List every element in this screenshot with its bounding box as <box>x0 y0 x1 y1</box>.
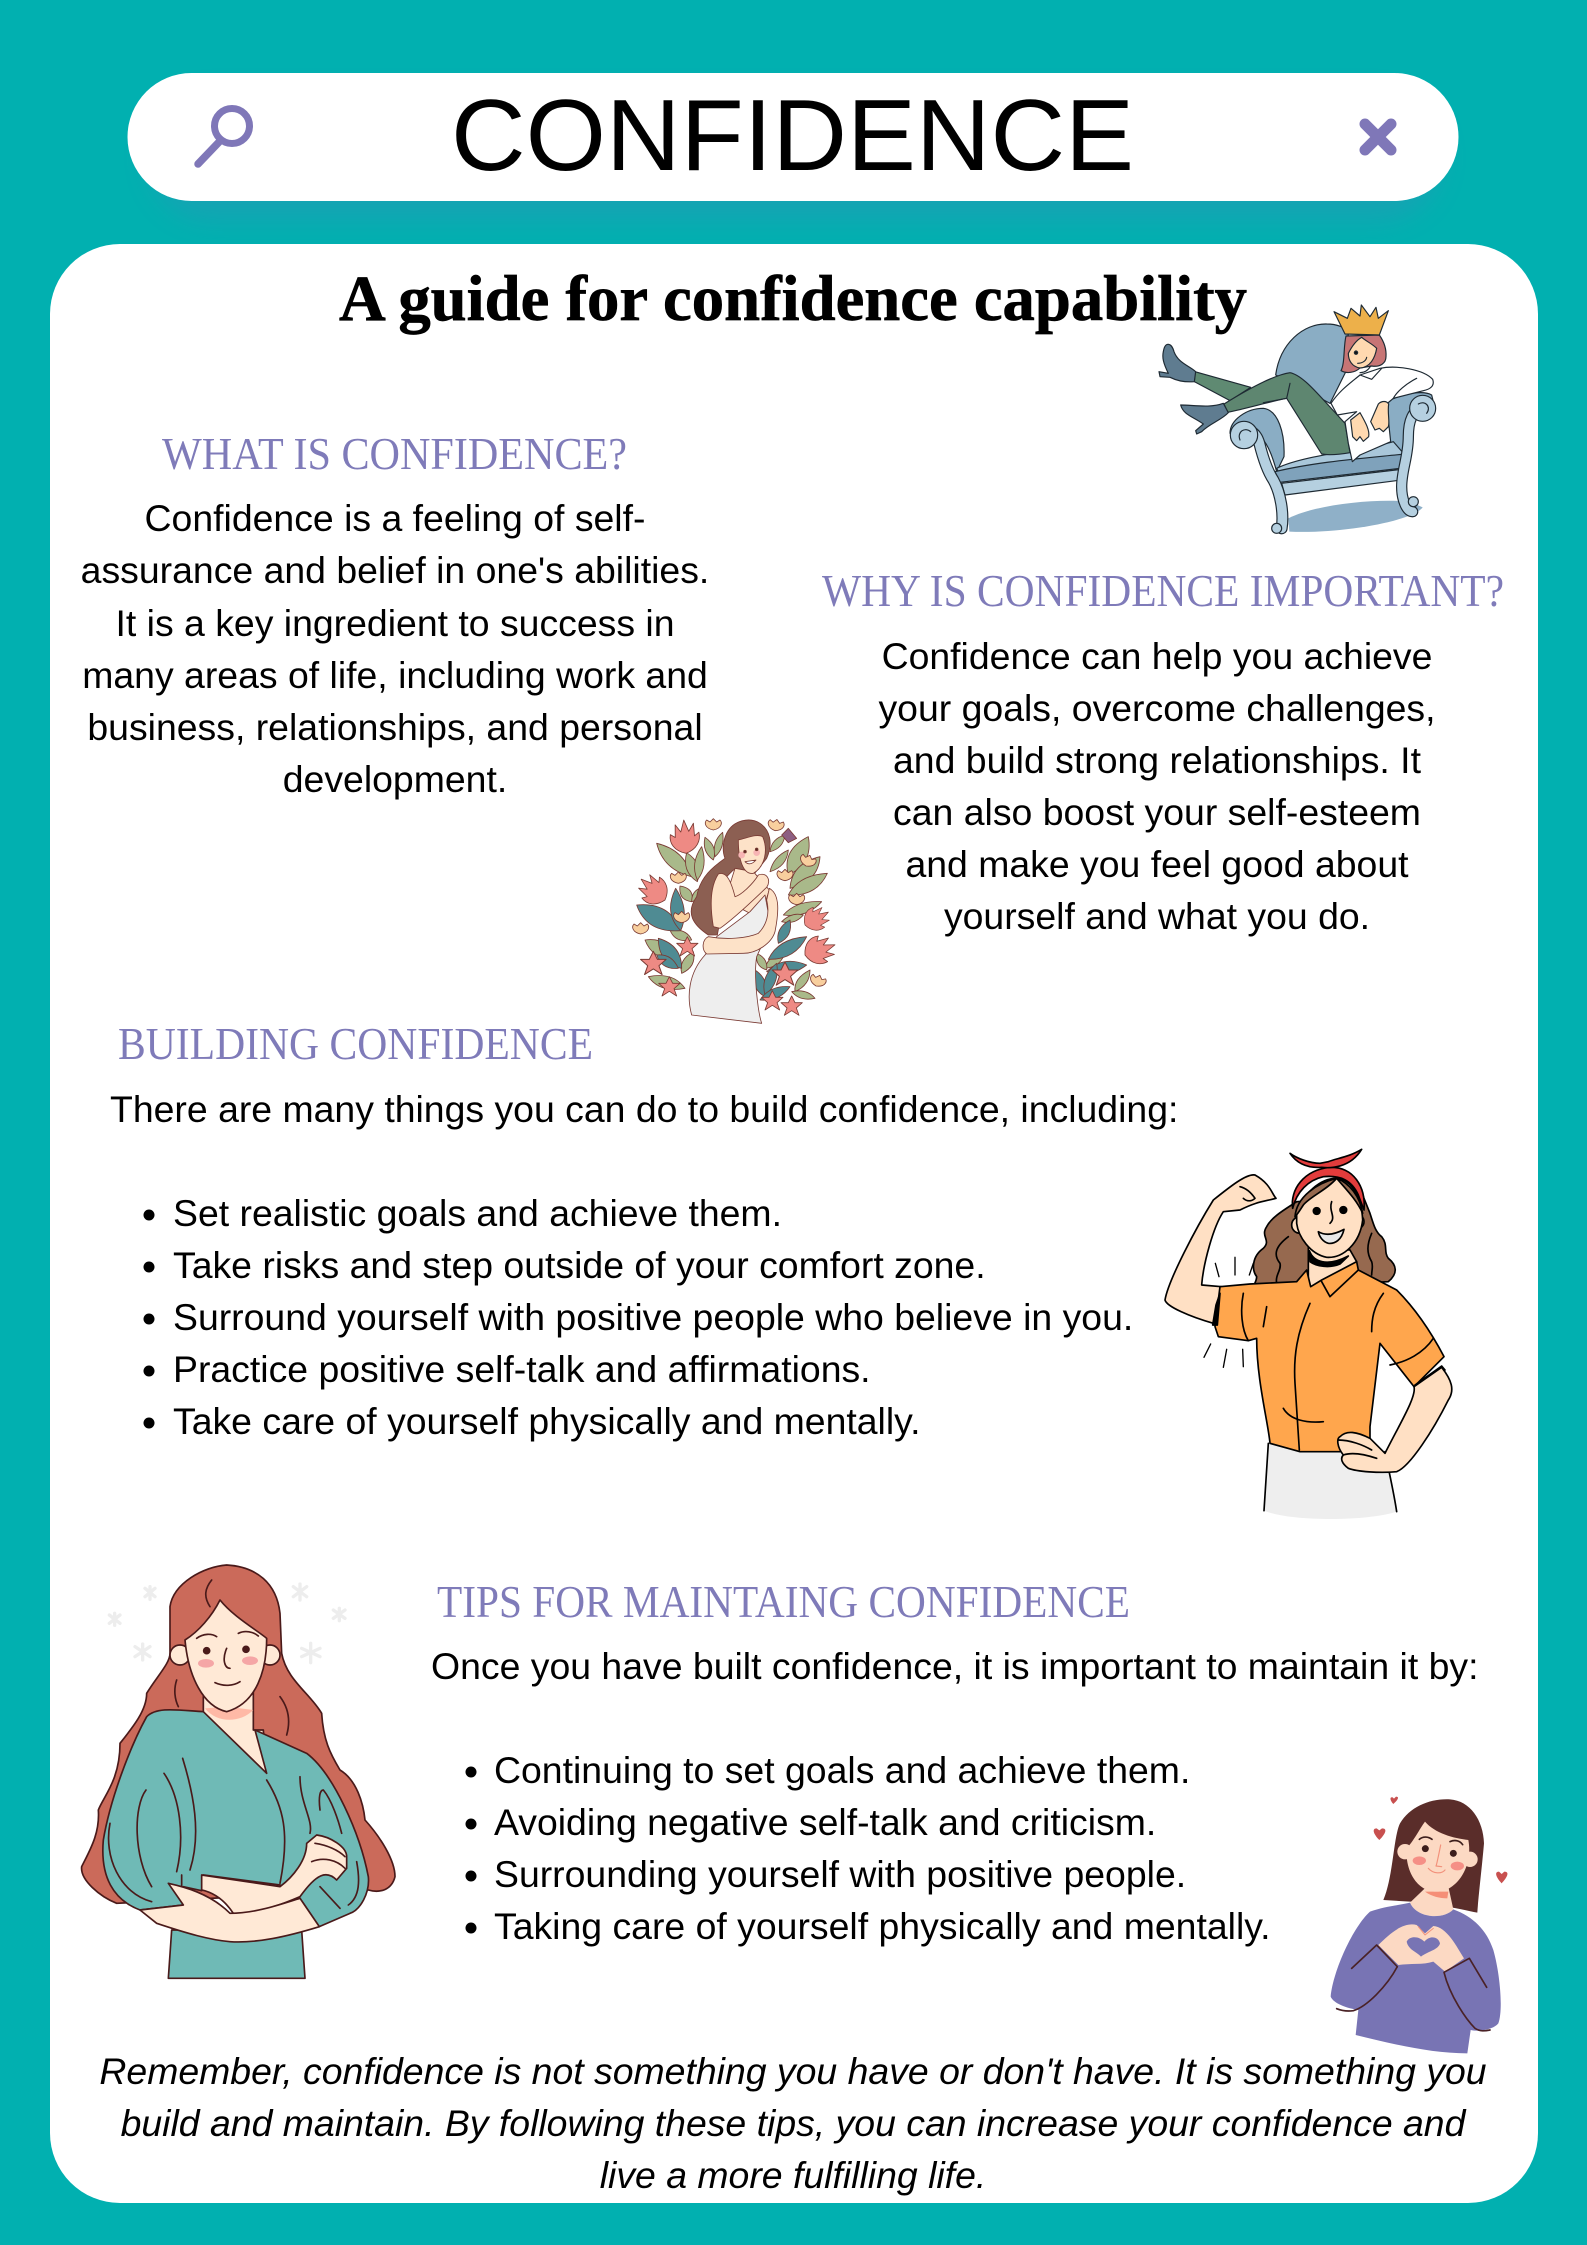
face <box>185 1600 267 1712</box>
neck <box>1308 1247 1357 1303</box>
search bar <box>128 73 1458 220</box>
neck <box>203 1690 267 1773</box>
heading: building confidence: BUILDING CONFIDENCE <box>118 1018 593 1069</box>
illustration: woman making heart <box>1331 1797 1507 2053</box>
white shirt <box>1331 367 1433 462</box>
hair <box>82 1565 395 1903</box>
icon: close cross <box>1365 124 1391 150</box>
text block: what is confidence: It is a key ingredient to success in <box>115 602 675 644</box>
skirt <box>1264 1443 1397 1519</box>
text block: what is confidence: Confidence is a feeling of self- <box>145 497 645 539</box>
intro text: building: There are many things you can do to build confidence, including: <box>110 1088 1178 1130</box>
panel: why is confidence important <box>822 565 1504 937</box>
chair shadow <box>1288 501 1423 532</box>
face <box>738 836 765 873</box>
forearm at waist <box>703 888 778 954</box>
sleeve lines <box>1337 1945 1490 2031</box>
pink flowers <box>632 819 840 1015</box>
hair <box>1253 1197 1395 1288</box>
list: building tips: Set realistic goals and achieve them. <box>173 1192 782 1234</box>
list: building tips <box>144 1192 1133 1442</box>
muscle lines <box>1204 1257 1253 1367</box>
hair <box>691 820 770 935</box>
headband <box>1292 1167 1364 1210</box>
list: building tips: Take care of yourself physically and mentally. <box>173 1400 920 1442</box>
list: maintaining tips: Taking care of yourself physically and mentally. <box>494 1905 1271 1947</box>
crown <box>1334 305 1388 335</box>
seat cushion <box>1277 442 1405 472</box>
list: maintaining tips: Surrounding yourself with positive people. <box>494 1853 1186 1895</box>
text block: why is confidence important: and build strong relationships. It <box>893 739 1422 781</box>
chair right arm <box>1387 393 1435 455</box>
text block: what is confidence: many areas of life, including work and <box>82 654 708 696</box>
illustration: woman with arms crossed <box>82 1565 395 1978</box>
shirt <box>1215 1262 1444 1452</box>
list: maintaining tips: Continuing to set goals and achieve them. <box>494 1749 1190 1791</box>
text block: why is confidence important: can also boost your self-esteem <box>893 791 1421 833</box>
icon: magnifying glass <box>198 108 250 164</box>
text block: what is confidence: business, relationships, and personal <box>87 706 703 748</box>
purple blossom <box>782 828 797 843</box>
hands forming heart <box>1378 1924 1464 1972</box>
intro text: tips: Once you have built confidence, it is important to maintain it by: <box>431 1645 1478 1687</box>
search bar title: CONFIDENCE <box>451 80 1134 192</box>
face <box>1348 337 1377 368</box>
text block: why is confidence important: and make you feel good about <box>905 843 1409 885</box>
hearts <box>1374 1797 1507 1883</box>
heading: why is confidence important: WHY IS CONFIDENCE IMPORTANT? <box>822 565 1504 616</box>
hands <box>1351 413 1369 441</box>
teal leaves <box>637 888 807 1000</box>
panel: tips for maintaining confidence <box>431 1576 1478 1947</box>
text block: why is confidence important <box>878 635 1436 937</box>
closing statement: Remember, confidence is not something you have or don't have. It is something you <box>99 2050 1487 2092</box>
sleeve band <box>1213 1293 1445 1388</box>
illustration: woman with flowers <box>632 818 840 1023</box>
teal top <box>103 1710 369 1927</box>
illustration: woman on throne <box>1159 305 1436 533</box>
arm across chest <box>711 873 769 928</box>
text block: why is confidence important: yourself and what you do. <box>944 895 1370 937</box>
sweater <box>1331 1903 1501 2053</box>
list: building tips: Surround yourself with positive people who believe in you. <box>173 1296 1133 1338</box>
ears <box>1397 1844 1413 1859</box>
list: building tips: Practice positive self-talk and affirmations. <box>173 1348 871 1390</box>
chair frame <box>1243 408 1422 528</box>
guide heading: A guide for confidence capability <box>339 263 1247 335</box>
panel: what is confidence <box>81 428 709 800</box>
text block: why is confidence important: Confidence can help you achieve <box>882 635 1432 677</box>
chair back <box>1276 324 1348 403</box>
neck <box>1410 1887 1453 1916</box>
green leaves <box>645 832 827 999</box>
panel: building confidence <box>110 1018 1178 1442</box>
text block: why is confidence important: your goals, overcome challenges, <box>878 687 1436 729</box>
list: maintaining tips <box>466 1749 1271 1947</box>
cream blossoms <box>633 818 827 989</box>
raised arm <box>1165 1175 1276 1323</box>
face <box>1407 1822 1469 1892</box>
closing statement: build and maintain. By following these tips, you can increase your confidence and <box>121 2102 1467 2144</box>
list: building tips: Take risks and step outside of your comfort zone. <box>173 1244 986 1286</box>
ears <box>170 1645 190 1665</box>
hair <box>1383 1799 1484 1913</box>
text block: what is confidence <box>81 497 709 800</box>
text block: what is confidence: development. <box>283 758 507 800</box>
hair <box>1341 335 1386 373</box>
sparkles <box>109 1584 345 1663</box>
front boot <box>1181 403 1228 434</box>
closing statement: live a more fulfilling life. <box>600 2154 986 2196</box>
front leg <box>1224 373 1350 455</box>
list: maintaining tips: Avoiding negative self-talk and criticism. <box>494 1801 1156 1843</box>
closing statement <box>99 2050 1487 2196</box>
text block: what is confidence: assurance and belief in one's abilities. <box>81 549 709 591</box>
dress <box>689 895 771 1023</box>
hip arm <box>1338 1367 1452 1472</box>
illustration: woman flexing arm <box>1165 1149 1452 1519</box>
boot upper <box>1159 344 1196 382</box>
back leg <box>1194 372 1251 401</box>
neck and chest <box>725 868 769 913</box>
arms <box>202 1835 347 1913</box>
heading: what is confidence: WHAT IS CONFIDENCE? <box>162 428 627 479</box>
face <box>1292 1217 1308 1233</box>
heading: tips: TIPS FOR MAINTAING CONFIDENCE <box>437 1576 1130 1627</box>
chair left arm <box>1230 408 1284 472</box>
